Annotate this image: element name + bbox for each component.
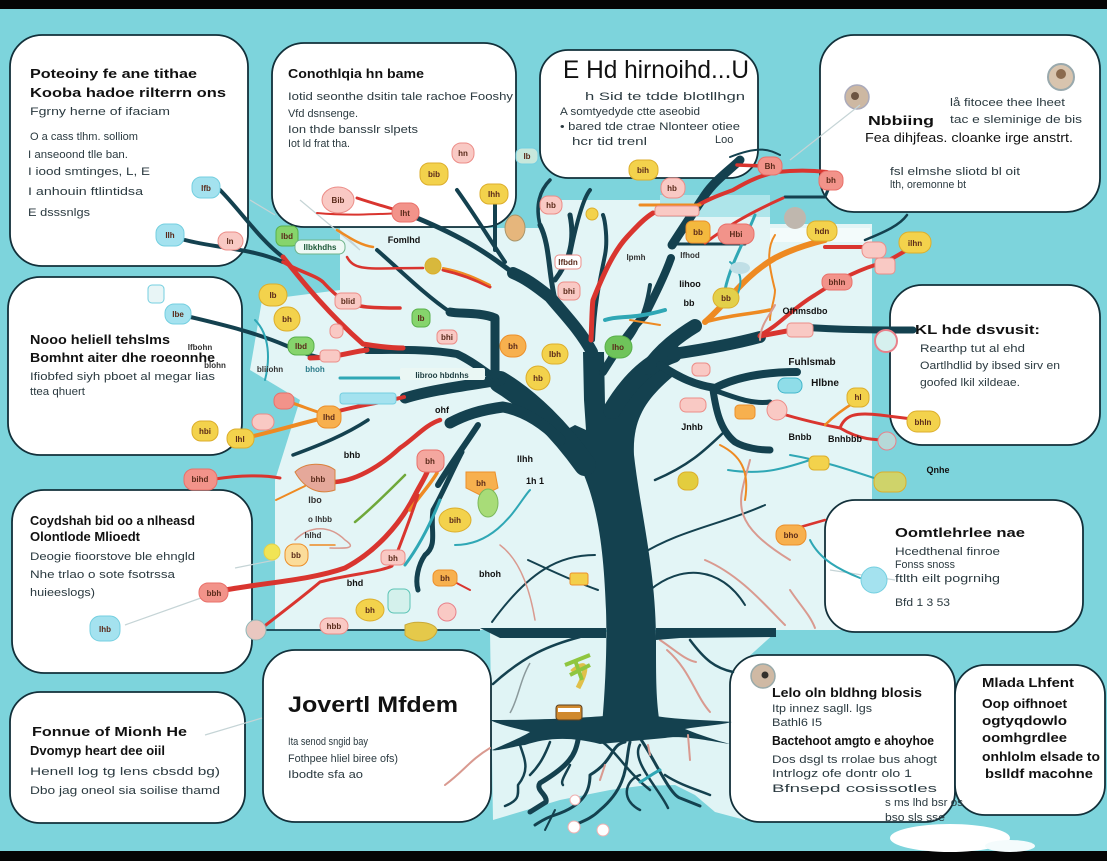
panel: main title: A somtyedyde ctte aseobid	[560, 106, 700, 118]
panel: middle right	[890, 285, 1100, 445]
nodes: top right cluster: Bh	[765, 162, 775, 171]
nodes: centre trunk labels: bhb	[344, 450, 361, 460]
panel: top second: Conothlqia hn bame	[288, 66, 424, 81]
icon: avatar left	[845, 85, 869, 109]
nodes: middle left cluster: Ib	[269, 291, 277, 300]
nodes: upper left cluster: ln	[226, 237, 234, 246]
nodes: centre trunk labels: Ipmh	[626, 253, 646, 262]
white smudge bottom right	[885, 797, 1035, 852]
panel: top left: Fgrny herne of ifaciam	[30, 106, 170, 118]
white smudge bottom right: bso sls sse	[885, 812, 945, 824]
nodes: top right cluster: bhln	[829, 278, 846, 287]
small connector text, left: Ifbohn	[188, 343, 212, 352]
nodes: top right cluster: ilhn	[908, 239, 922, 248]
panel: bottom right: Mlada Lhfent	[982, 675, 1075, 690]
panel: bottom second: Fothpee hliel biree ofs)	[288, 753, 398, 765]
nodes: centre trunk labels: bb	[684, 298, 695, 308]
nodes: lower left cluster: bh	[440, 574, 450, 583]
panel: top right: lå fitocee thee lheet	[950, 97, 1065, 109]
nodes: lower left cluster	[90, 450, 501, 641]
panel: main title: h Sid te tdde blotllhgn	[585, 91, 745, 103]
panel: middle left: ttea qhuert	[30, 386, 85, 398]
nodes: centre trunk labels: hb	[533, 374, 543, 383]
panel: bottom left: Henell log tg lens cbsdd bg)	[30, 766, 220, 778]
nodes: middle left cluster	[192, 284, 485, 448]
nodes: middle left cluster: hbi	[199, 427, 211, 436]
limb: right primary	[612, 354, 673, 410]
panel: bottom third: Dos dsgl ts rrolae bus ahogt	[772, 754, 937, 766]
panel: middle left: Nooo heliell tehslms	[30, 332, 170, 347]
panel: lower left: Nhe trlao o sote fsotrssa	[30, 569, 176, 581]
panel: main title	[540, 50, 758, 178]
nodes: middle left cluster: bh	[282, 315, 292, 324]
nodes: lower left cluster: bih	[449, 516, 461, 525]
panel: lower left: Coydshah bid oo a nlheasd	[30, 513, 195, 528]
panel: top second: Iot ld frat tha.	[288, 138, 350, 150]
nodes: lower left cluster: hbb	[327, 622, 341, 631]
nodes: centre trunk labels: Hlbne	[811, 378, 839, 389]
limb: left upper	[513, 273, 592, 352]
panel: main title: Loo	[715, 134, 733, 146]
panel: lower right: Oomtlehrlee nae	[895, 525, 1025, 540]
panel: lower right	[825, 500, 1083, 632]
panel: bottom second: Ibodte sfa ao	[288, 769, 363, 781]
panel: middle right: Rearthp tut al ehd	[920, 343, 1025, 355]
panel: top left: E dsssnlgs	[28, 207, 91, 219]
nodes: middle left cluster: Ibd	[295, 342, 307, 351]
nodes: lower left cluster: Ihb	[99, 625, 111, 634]
panel: bottom third	[730, 655, 955, 822]
nodes: upper left cluster: hn	[458, 149, 468, 158]
small connector text, left: bhoh	[305, 365, 325, 374]
nodes: centre trunk labels: Fuhlsmab	[788, 357, 836, 368]
nodes: lower left cluster: hlhd	[305, 531, 322, 540]
nodes: centre trunk labels: Jnhb	[681, 422, 703, 432]
nodes: lower left cluster: bhoh	[479, 569, 501, 579]
panel: top right: Nbbiing	[868, 113, 934, 128]
nodes: lower left cluster: bhb	[311, 475, 325, 484]
nodes: top right cluster: hb	[667, 184, 677, 193]
panel: bottom right: onhlolm elsade to	[982, 749, 1100, 764]
nodes: centre trunk labels: Fomlhd	[388, 235, 420, 245]
panel: middle left: Bomhnt aiter dhe roeonnhe	[30, 350, 215, 365]
small connector text, left: bliiohn	[257, 365, 283, 374]
panel: bottom third: Itp innez sagll. lgs	[772, 703, 873, 715]
nodes: lower left cluster: o lhbb	[308, 515, 332, 524]
nodes: upper left cluster: bib	[428, 170, 440, 179]
nodes: upper left cluster: IIh	[165, 231, 175, 240]
nodes: centre trunk labels: Qnhe	[926, 465, 950, 475]
right branches, coloured	[591, 165, 920, 578]
panel: top left: Kooba hadoe rilterrn ons	[30, 85, 226, 100]
left branches, coloured	[178, 190, 530, 628]
nodes: top right cluster: bb	[693, 228, 703, 237]
panel: bottom left: Dvomyp heart dee oiil	[30, 743, 165, 758]
panel: bottom third: Intrlogz ofe dontr olo 1	[772, 768, 912, 780]
panel: top left: I anhouin ftlintidsa	[28, 186, 144, 198]
icon: small bonsai with box	[556, 655, 590, 720]
nodes: middle left cluster: Iibroo hbdnhs	[415, 371, 469, 380]
nodes: middle left cluster: Ihl	[235, 435, 245, 444]
panel: middle left: Ifiobfed siyh pboet al megar lias	[30, 371, 216, 383]
nodes: centre trunk labels: Bnbb	[788, 432, 812, 442]
small connector text, left	[188, 343, 325, 374]
nodes: upper left cluster: Ibd	[281, 232, 293, 241]
nodes: upper left cluster: Bib	[332, 196, 345, 205]
panel: top left: O a cass tlhm. solliom	[30, 131, 138, 143]
nodes: middle left cluster: bhi	[441, 333, 453, 342]
white smudge bottom right: s ms lhd bsr os	[885, 797, 964, 809]
panel: top second: Vfd dsnsenge.	[288, 108, 358, 120]
nodes: centre trunk labels: Bnhbbb	[828, 434, 862, 444]
nodes: upper left cluster	[148, 143, 598, 324]
nodes: top right cluster: hdn	[815, 227, 829, 236]
panel: main title: • bared tde ctrae Nlonteer otiee	[560, 121, 740, 133]
small connector text, left: blohn	[204, 361, 226, 370]
panel: middle right: KL hde dsvusit:	[915, 322, 1040, 337]
panel: bottom second: Jovertl Mfdem	[288, 692, 458, 717]
nodes: top right cluster: bho	[784, 531, 798, 540]
panel: middle left	[8, 277, 242, 455]
nodes: centre trunk labels: Ifhod	[680, 251, 700, 260]
panel: lower left: Olontlode Mlioedt	[30, 529, 141, 544]
panel: top second: Iotid seonthe dsitin tale rachoe Fooshy	[288, 91, 514, 103]
panel: lower left: huieeslogs)	[30, 587, 95, 599]
panel: main title: hcr tid trenl	[572, 136, 647, 148]
nodes: middle left cluster: blid	[341, 297, 355, 306]
panel: lower right: Bfd 1 3 53	[895, 597, 950, 609]
nodes: upper left cluster: Ifb	[201, 184, 211, 193]
nodes: top right cluster: bb	[721, 294, 731, 303]
panel: bottom right: bslldf macohne	[985, 766, 1093, 781]
nodes: lower left cluster: bh	[365, 606, 375, 615]
nodes: centre trunk labels: Ibh	[549, 350, 561, 359]
nodes: top right cluster: bh	[826, 176, 836, 185]
nodes: top right cluster: hl	[854, 393, 862, 402]
root flare	[490, 716, 732, 750]
nodes: centre trunk labels	[344, 235, 950, 486]
tree trunk and main limbs	[367, 150, 913, 725]
panel: bottom right: oomhgrdlee	[982, 730, 1067, 745]
limb: right upper	[603, 258, 671, 372]
nodes: centre trunk labels: Ofhmsdbo	[782, 306, 828, 316]
panel: top left: I iood smtinges, L, E	[28, 166, 150, 178]
panel: top right: lth, oremonne bt	[890, 179, 966, 191]
nodes: centre trunk labels: Iho	[612, 343, 624, 352]
central pale backdrop	[250, 195, 872, 820]
panel: lower right: Hcedthenal finroe	[895, 546, 1000, 558]
nodes: top right cluster	[570, 157, 940, 593]
nodes: upper left cluster: Ifbdn	[558, 258, 578, 267]
nodes: centre trunk labels: Iihoo	[679, 279, 701, 289]
nodes: top right cluster: bih	[637, 166, 649, 175]
panel: top left	[10, 35, 248, 266]
tree trunk	[555, 352, 678, 725]
panel: top right: Fea dihjfeas. cloanke irge anstrt.	[865, 130, 1073, 145]
horizontal trunk band and ground lines	[250, 628, 776, 640]
panel: bottom second	[263, 650, 491, 822]
nodes: upper left cluster: Ibe	[172, 310, 184, 319]
panel: bottom third: Bactehoot amgto e ahoyhoe	[772, 733, 934, 748]
panel: bottom third: Lelo oln bldhng blosis	[772, 685, 922, 700]
panel: bottom third: Bathl6 I5	[772, 717, 822, 729]
nodes: upper left cluster: Ib	[523, 152, 531, 161]
lower thin branches	[445, 433, 815, 785]
nodes: lower left cluster: bbh	[207, 589, 221, 598]
nodes: lower left cluster: bh	[425, 457, 435, 466]
panel: top right: tac e sleminige de bis	[950, 114, 1083, 126]
panel: top second: Ion thde bansslr slpets	[288, 124, 419, 136]
icon: avatar bottom	[751, 664, 775, 688]
panel: bottom left: Dbo jag oneol sia soilise thamd	[30, 785, 220, 797]
panel: top left: I anseoond tlle ban.	[28, 149, 128, 161]
icon: avatar top right	[1048, 64, 1074, 90]
panel: top right: fsl elmshe sliotd bl oit	[890, 166, 1020, 178]
nodes: upper left cluster: bhi	[563, 287, 575, 296]
panel: lower left: Deogie fioorstove ble ehngld	[30, 551, 195, 563]
nodes: top right cluster: bhln	[915, 418, 932, 427]
panel: bottom third: Bfnsepd cosissotles	[772, 783, 938, 795]
panel: bottom right: ogtyqdowlo	[982, 713, 1067, 728]
nodes: upper left cluster: Ihh	[488, 190, 500, 199]
nodes: upper left cluster: IIbkhdhs	[304, 243, 337, 252]
thin pale connector lines	[125, 105, 895, 735]
panel: bottom right: Oop oifhnoet	[982, 696, 1068, 711]
nodes: lower left cluster: bh	[388, 554, 398, 563]
panel: middle right: Oartlhdlid by ibsed sirv en	[920, 360, 1060, 372]
panel: lower right: ftlth eilt pogrnihg	[895, 573, 1000, 585]
panel: bottom left	[10, 692, 245, 823]
panel: bottom second: Ita senod sngid bay	[288, 736, 368, 748]
panel: bottom right	[955, 665, 1105, 815]
panel: top right	[820, 35, 1100, 212]
nodes: middle left cluster: Ihd	[323, 413, 335, 422]
nodes: lower left cluster: bb	[291, 551, 301, 560]
nodes: centre trunk labels: bh	[508, 342, 518, 351]
nodes: lower left cluster: bhd	[347, 578, 363, 588]
tree roots	[490, 716, 732, 836]
nodes: centre trunk labels: Ilhh	[517, 454, 533, 464]
panel: main title: E Hd hirnoihd...U	[563, 56, 749, 84]
panel: bottom left: Fonnue of Mionh He	[32, 724, 187, 739]
nodes: lower left cluster: bihd	[192, 475, 209, 484]
panel: lower left	[12, 490, 252, 673]
panel: top second	[272, 43, 516, 227]
panel: lower right: Fonss snoss	[895, 559, 955, 571]
panel: middle right: goofed lkil xildeae.	[920, 377, 1020, 389]
nodes: lower left cluster: Ibo	[308, 495, 322, 505]
nodes: upper left cluster: hb	[546, 201, 556, 210]
nodes: middle left cluster: Ib	[417, 314, 425, 323]
nodes: centre trunk labels: ohf	[435, 405, 450, 415]
nodes: centre trunk labels: 1h 1	[526, 476, 544, 486]
nodes: top right cluster: Hbi	[730, 230, 742, 239]
nodes: lower left cluster: bh	[476, 479, 486, 488]
panel: top left: Poteoiny fe ane tithae	[30, 66, 197, 81]
nodes: upper left cluster: Iht	[400, 209, 410, 218]
limb: left primary	[500, 382, 585, 465]
